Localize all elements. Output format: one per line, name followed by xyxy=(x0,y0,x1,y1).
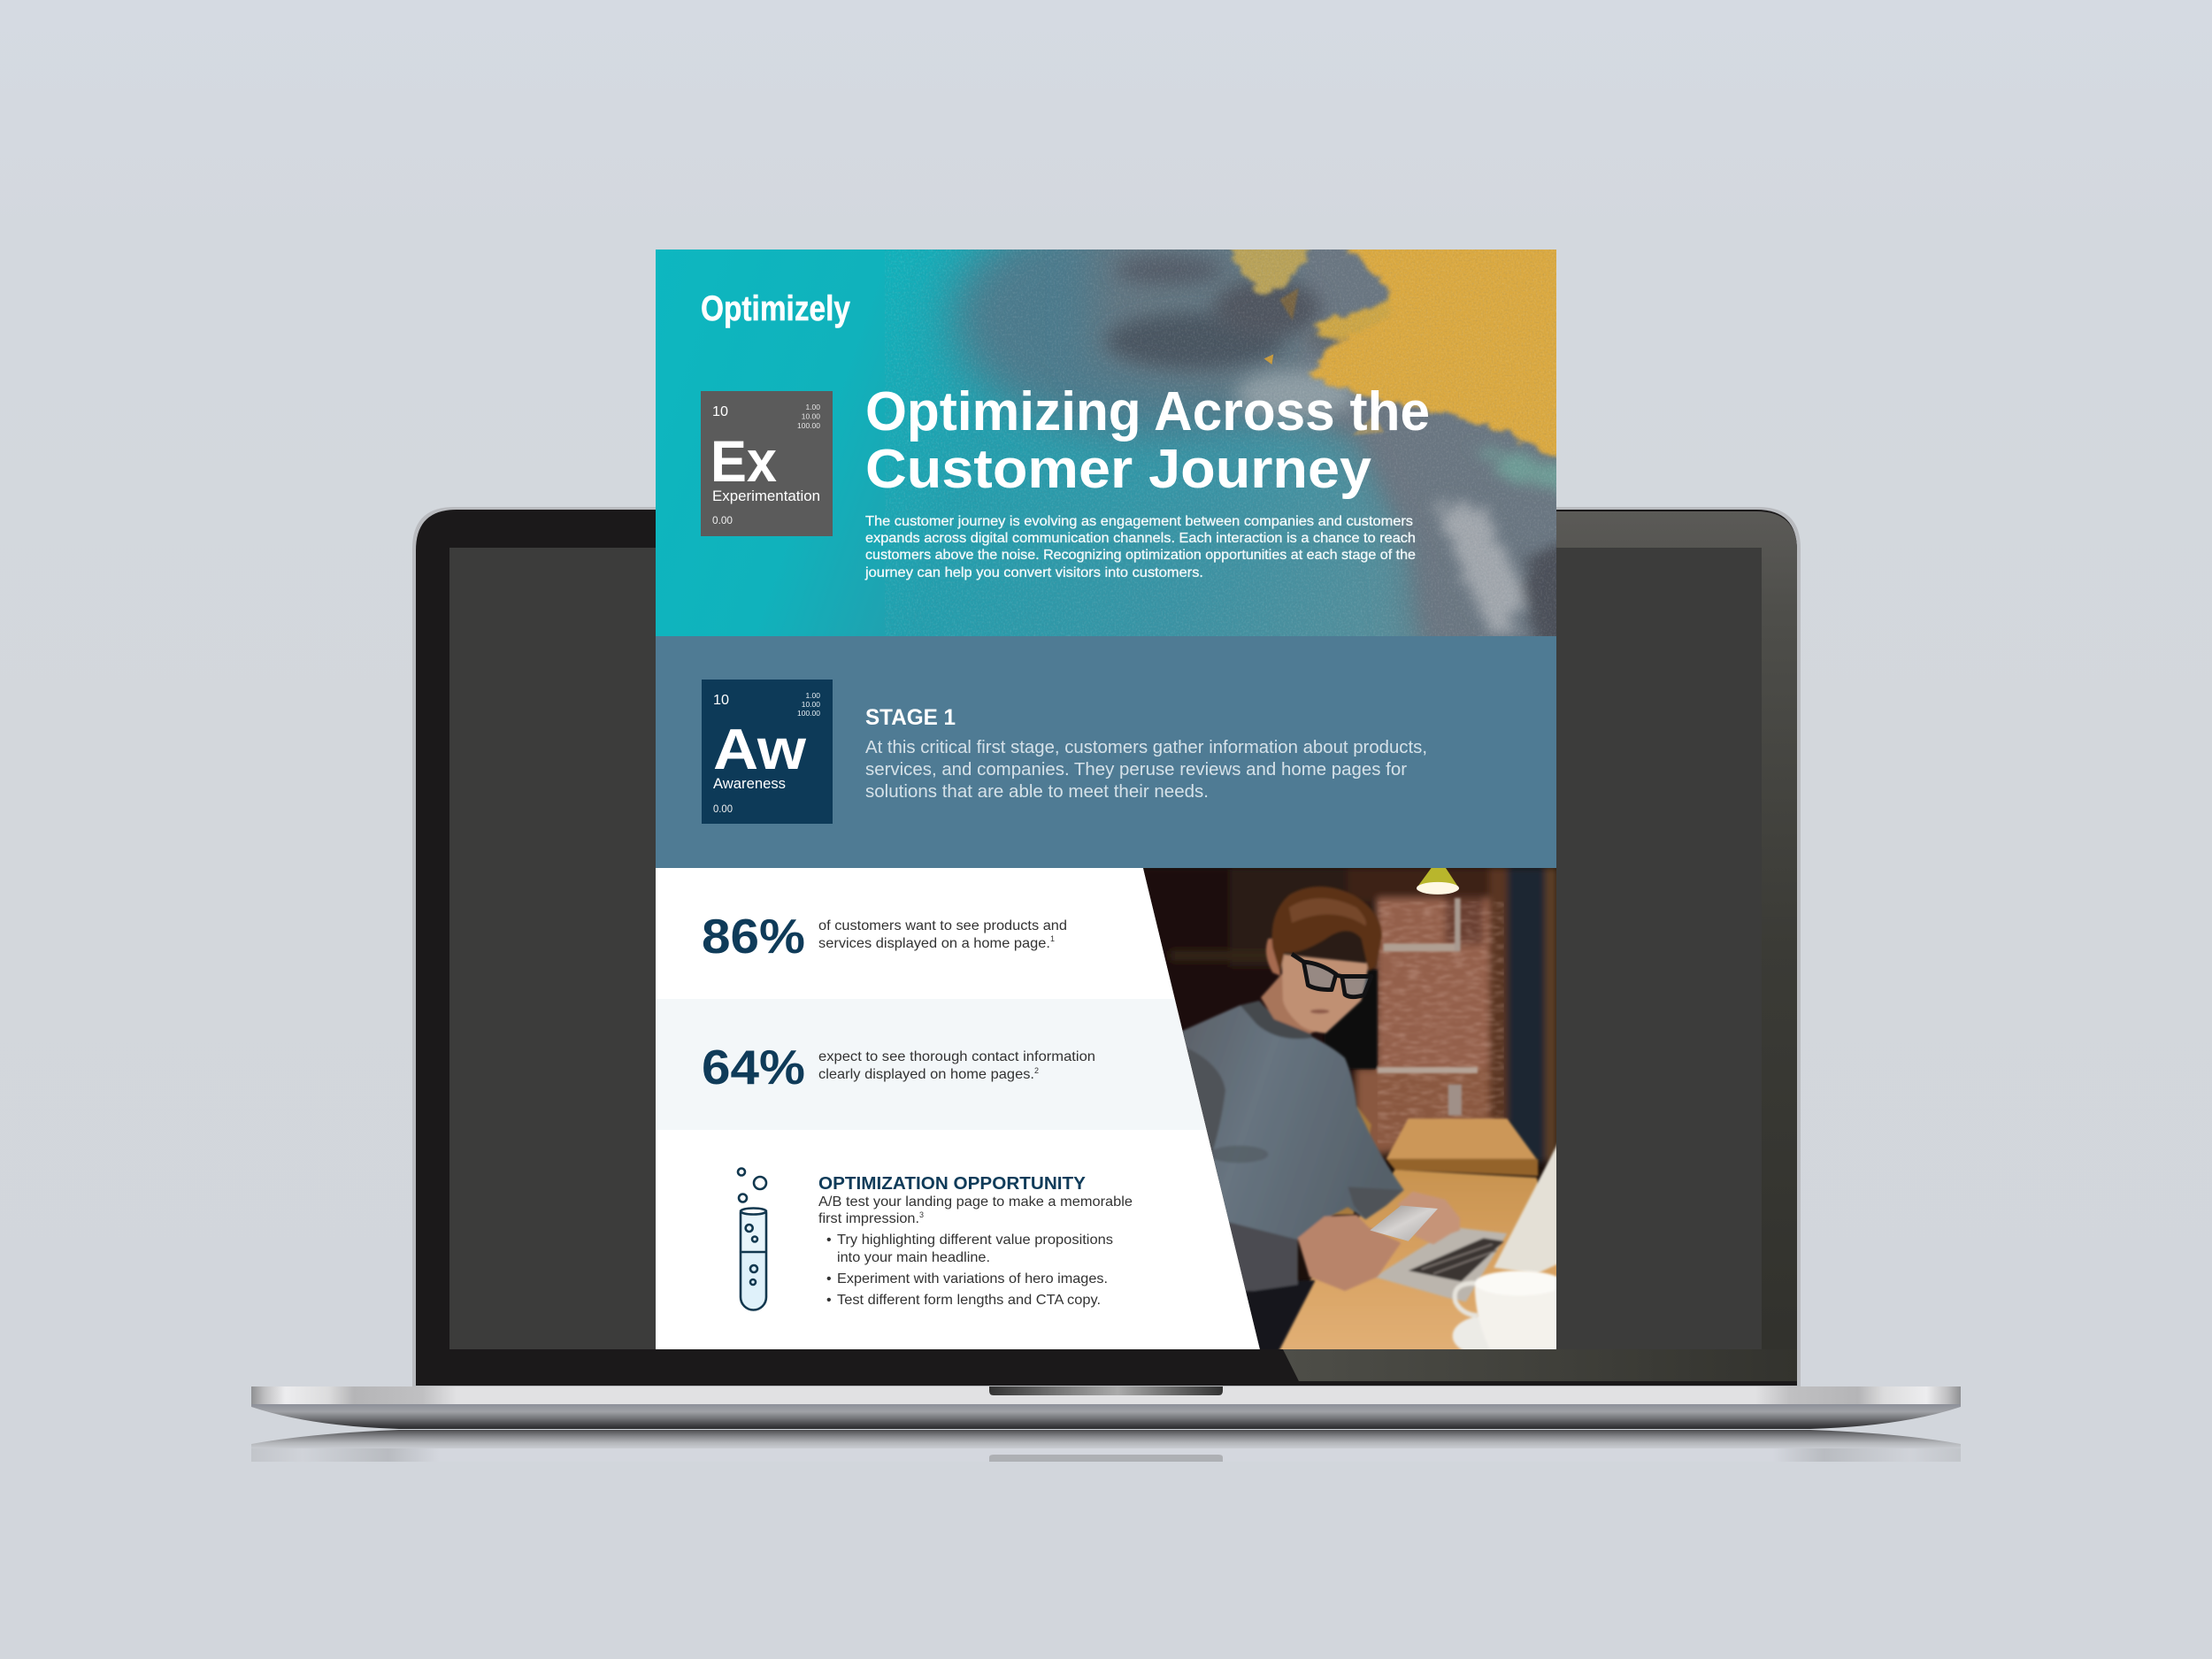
stat 64% xyxy=(702,1040,1095,1094)
opportunity text: Try highlighting different value propositions xyxy=(837,1233,1113,1248)
photo lamp xyxy=(1417,867,1459,895)
element tile: experimentation xyxy=(701,391,833,536)
stat 86%: 86% xyxy=(702,909,805,964)
title: Customer Journey xyxy=(865,439,1372,500)
opportunity text: • xyxy=(826,1271,832,1286)
lower bezel reflection xyxy=(1283,1349,1797,1381)
infographic page xyxy=(656,199,1580,1356)
stat 86%: 1 xyxy=(1050,934,1055,943)
laptop base xyxy=(251,1404,1961,1429)
element tile: experimentation: Experimentation xyxy=(712,488,820,504)
stat 86%: services displayed on a home page. xyxy=(818,936,1050,951)
element tile: experimentation: 1.00 xyxy=(805,403,820,411)
opportunity text: into your main headline. xyxy=(837,1250,990,1265)
notch reflection xyxy=(989,1455,1223,1462)
element tile: awareness: 0.00 xyxy=(713,803,733,815)
opportunity text: • xyxy=(826,1233,832,1248)
laptop bezel xyxy=(416,510,1797,1386)
element tile: experimentation: 100.00 xyxy=(797,421,820,430)
laptop xyxy=(251,507,1961,1462)
optimization opportunity xyxy=(818,1173,1133,1308)
opportunity text: Test different form lengths and CTA copy. xyxy=(837,1293,1101,1308)
laptop notch xyxy=(989,1386,1223,1395)
element tile: awareness: 10 xyxy=(713,693,729,708)
opportunity text xyxy=(818,1194,1133,1308)
photo tables xyxy=(1272,1106,1560,1355)
intro paragraph: expands across digital communication channels. Each interaction is a chance to reach xyxy=(865,531,1416,546)
ear xyxy=(1266,939,1283,976)
photo phone xyxy=(1370,1205,1438,1241)
intro paragraph: The customer journey is evolving as engagement between companies and customers xyxy=(865,514,1413,529)
stage 1 band xyxy=(656,636,1556,868)
header panel xyxy=(656,250,1556,636)
stage description: services, and companies. They peruse reviews and home pages for xyxy=(865,759,1407,780)
header aerial image xyxy=(656,250,1556,636)
element tile: experimentation: 10 xyxy=(712,404,728,419)
hands xyxy=(1298,1215,1401,1291)
title xyxy=(865,381,1430,500)
stat 64%: clearly displayed on home pages. xyxy=(818,1067,1034,1082)
element tile: awareness: 100.00 xyxy=(797,709,820,718)
stage description: solutions that are able to meet their needs. xyxy=(865,781,1209,802)
intro paragraph xyxy=(864,514,1416,580)
title: Optimizing Across the xyxy=(865,381,1430,442)
photo: man with phone and laptop xyxy=(1141,867,1563,1356)
intro paragraph: customers above the noise. Recognizing optimization opportunities at each stage of the xyxy=(865,548,1416,563)
neck xyxy=(1260,973,1317,1035)
bezel reflection xyxy=(1283,511,1797,1381)
icon: test tube xyxy=(738,1168,766,1310)
mockup scene xyxy=(251,250,1961,1462)
stage description: At this critical first stage, customers gather information about products, xyxy=(865,737,1427,757)
element tile: experimentation: 0.00 xyxy=(712,514,733,526)
photo cup xyxy=(1451,1270,1556,1349)
laptop screen xyxy=(449,548,1762,1349)
stage heading: STAGE 1 xyxy=(865,705,956,730)
element tile: awareness: 1.00 xyxy=(805,691,820,700)
legs xyxy=(1230,1280,1316,1355)
stat 64%: 2 xyxy=(1034,1066,1039,1075)
opportunity text: Experiment with variations of hero images. xyxy=(837,1271,1108,1286)
opportunity heading: OPTIMIZATION OPPORTUNITY xyxy=(818,1173,1086,1194)
photo glasses xyxy=(1292,954,1371,997)
stat 64%: 64% xyxy=(702,1040,805,1094)
element tile: awareness xyxy=(702,680,833,824)
hinge bar xyxy=(251,1386,1961,1404)
element tile: experimentation: Ex xyxy=(710,428,777,494)
opportunity text: first impression. xyxy=(818,1211,919,1226)
opportunity text: • xyxy=(826,1293,832,1308)
logo: Optimizely xyxy=(701,289,851,328)
sweater xyxy=(1159,1005,1404,1291)
hair xyxy=(1271,887,1382,972)
intro paragraph: journey can help you convert visitors into customers. xyxy=(864,565,1203,580)
stat 86% xyxy=(702,909,1067,964)
hinge reflection xyxy=(251,1448,1961,1462)
stats panel xyxy=(656,868,1556,1349)
laptop lid xyxy=(412,507,1801,1386)
photo brick wall xyxy=(1378,902,1504,1143)
stage description xyxy=(865,737,1427,802)
face xyxy=(1281,954,1369,1033)
opportunity text: A/B test your landing page to make a memorable xyxy=(818,1194,1133,1210)
opportunity text: 3 xyxy=(919,1210,924,1219)
stat 86%: of customers want to see products and xyxy=(818,918,1067,933)
collar xyxy=(1240,1001,1312,1039)
photo background xyxy=(1141,867,1557,1178)
element tile: awareness: Awareness xyxy=(713,775,786,792)
element tile: awareness: Aw xyxy=(713,717,806,781)
photo laptop xyxy=(1374,1139,1560,1302)
base reflection xyxy=(251,1430,1961,1448)
element tile: experimentation: 10.00 xyxy=(802,412,820,421)
element tile: awareness: 10.00 xyxy=(802,700,820,709)
photo person xyxy=(1159,887,1460,1355)
stat 64%: expect to see thorough contact information xyxy=(818,1049,1095,1064)
